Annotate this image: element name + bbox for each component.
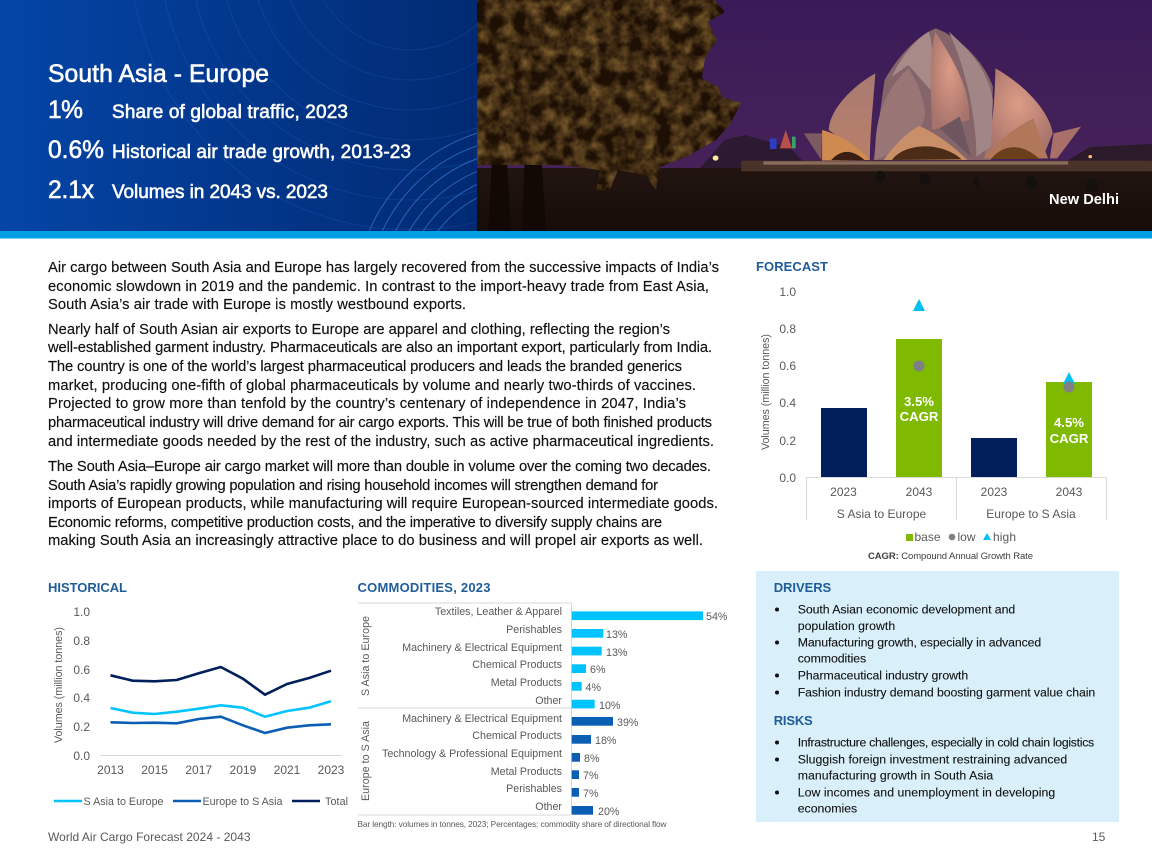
commodities bar chart: Other — [535, 801, 562, 813]
panel: forecast — [756, 259, 1106, 562]
commodities bar chart: Perishables — [506, 783, 562, 795]
forecast bar chart: 2023 — [981, 485, 1008, 499]
commodities bar chart: Other — [535, 695, 562, 707]
forecast bar chart: 2043 — [906, 485, 933, 499]
forecast heading: FORECAST — [756, 259, 828, 274]
stat: historical growth: 0.6% — [48, 137, 104, 164]
paragraph 1: South Asia’s air trade with Europe is mostly westbound exports. — [48, 297, 466, 313]
paragraph 3: imports of European products, while manufacturing will require European-sourced intermediate goods. — [48, 496, 718, 512]
stat: share of traffic: Share of global traffic, 2023 — [112, 102, 348, 123]
stat: historical growth — [48, 137, 411, 164]
photo caption: New Delhi — [1049, 192, 1119, 208]
commodities bar chart: 13% — [606, 647, 628, 659]
historical legend: Total — [325, 796, 348, 808]
forecast legend: high — [993, 530, 1016, 544]
line chart: 2019 — [230, 763, 257, 777]
paragraph 3: South Asia’s rapidly growing population and rising household incomes will strengthen demand for — [48, 478, 658, 494]
commodities bar chart: Machinery & Electrical Equipment — [402, 642, 562, 654]
commodities bar chart: Chemical Products — [472, 659, 562, 671]
panel: historical — [48, 580, 348, 808]
body text — [47, 260, 719, 549]
forecast bar chart: 1.0 — [779, 285, 796, 299]
panel: drivers and risks — [756, 571, 1119, 822]
paragraph 2: Nearly half of South Asian air exports to Europe are apparel and clothing, reflecting the region’s — [48, 322, 670, 338]
risks list: economies — [798, 802, 857, 816]
commodities bar chart: 4% — [586, 682, 601, 694]
commodities bar chart: 10% — [599, 700, 621, 712]
paragraph 3: The South Asia–Europe air cargo market will more than double in volume over the coming two decades. — [48, 459, 711, 475]
line chart: 0.4 — [73, 691, 90, 705]
risks list: Low incomes and unemployment in developing — [798, 786, 1055, 800]
forecast legend: base — [914, 530, 941, 544]
risks heading: RISKS — [774, 713, 813, 728]
paragraph 1 — [48, 260, 719, 313]
line chart: 2015 — [141, 763, 168, 777]
line chart: 2017 — [185, 763, 212, 777]
commodities bar chart: Chemical Products — [472, 730, 562, 742]
header banner — [0, 0, 1152, 239]
forecast legend — [906, 530, 1016, 544]
risks list — [775, 736, 1094, 816]
line chart: 0.8 — [73, 634, 90, 648]
paragraph 3: making South Asia an increasingly attractive place to do business and will propel air exports as well. — [48, 533, 703, 549]
paragraph 2: Projected to grow more than tenfold by the country’s centenary of independence in 2047, India’s — [48, 396, 686, 412]
drivers list: commodities — [798, 652, 866, 666]
forecast bar chart: 4.5% — [1054, 415, 1084, 430]
line chart: Volumes (million tonnes) — [53, 627, 65, 743]
stat: historical growth: Historical air trade growth, 2013-23 — [112, 142, 411, 163]
photo: Lotus Temple, New Delhi — [477, 0, 1152, 231]
commodities footnote: Bar length: volumes in tonnes, 2023; Percentages: commodity share of directional flow — [358, 819, 668, 829]
footer: 15 — [1092, 830, 1106, 844]
forecast bar chart: Europe to S Asia — [986, 507, 1076, 521]
risks list: manufacturing growth in South Asia — [798, 769, 993, 783]
commodities bar chart: Machinery & Electrical Equipment — [402, 713, 562, 725]
commodities bar chart: 39% — [617, 717, 639, 729]
CAGR note: CAGR: Compound Annual Growth Rate — [868, 551, 1033, 562]
paragraph 1: Air cargo between South Asia and Europe has largely recovered from the successive impacts of India’s — [48, 260, 719, 276]
panel: commodities — [358, 580, 728, 829]
paragraph 2: well-established garment industry. Pharmaceuticals are also an important export, particularly from India. — [47, 340, 712, 356]
paragraph 2: and intermediate goods needed by the rest of the industry, such as active pharmaceutical ingredients. — [48, 434, 714, 450]
commodities bar chart: Metal Products — [491, 766, 562, 778]
risks list: Sluggish foreign investment restraining advanced — [798, 753, 1067, 767]
commodities bar chart: 7% — [583, 770, 599, 782]
stat: share of traffic — [48, 97, 348, 124]
forecast bar chart: 0.8 — [779, 322, 796, 336]
commodities bar chart: S Asia to Europe — [360, 616, 372, 696]
paragraph 2: pharmaceutical industry will drive demand for air cargo exports. This will be true of both finished products — [48, 415, 712, 431]
forecast bar chart: Volumes (million tonnes) — [760, 334, 772, 450]
risks list: Infrastructure challenges, especially in cold chain logistics — [798, 736, 1094, 750]
forecast bar chart: 3.5% — [904, 394, 934, 409]
drivers list: Fashion industry demand boosting garment value chain — [798, 686, 1095, 700]
forecast bar chart: 0.0 — [779, 471, 796, 485]
forecast bar chart: 0.6 — [779, 359, 796, 373]
forecast bar chart: 2043 — [1056, 485, 1083, 499]
forecast bar chart: 0.4 — [779, 396, 796, 410]
drivers list: Manufacturing growth, especially in advanced — [798, 636, 1041, 650]
forecast bar chart: 2023 — [830, 485, 857, 499]
historical heading: HISTORICAL — [48, 580, 127, 595]
paragraph 2: market, producing one-fifth of global pharmaceuticals by volume and nearly two-thirds of vaccines. — [48, 378, 696, 394]
stat: volumes multiple: Volumes in 2043 vs. 2023 — [112, 182, 328, 203]
line chart: 2023 — [318, 763, 345, 777]
commodities bar chart: 54% — [706, 611, 728, 623]
line chart — [53, 605, 345, 777]
commodities bar chart: Technology & Professional Equipment — [382, 748, 562, 760]
paragraph 2 — [47, 322, 714, 450]
commodities bar chart: Europe to S Asia — [360, 721, 372, 801]
stat: share of traffic: 1% — [48, 97, 83, 124]
line chart: 0.0 — [73, 749, 90, 763]
historical legend — [54, 796, 348, 808]
commodities bar chart — [358, 603, 728, 818]
commodities bar chart: Perishables — [506, 624, 562, 636]
drivers list — [775, 603, 1095, 700]
line chart: 2021 — [274, 763, 301, 777]
stat: volumes multiple — [48, 177, 328, 204]
drivers heading: DRIVERS — [774, 580, 832, 595]
commodities bar chart: 20% — [598, 806, 620, 818]
historical legend: Europe to S Asia — [202, 796, 283, 808]
forecast bar chart: S Asia to Europe — [837, 507, 927, 521]
commodities bar chart: Textiles, Leather & Apparel — [435, 606, 562, 618]
forecast legend: low — [958, 530, 976, 544]
commodities heading: COMMODITIES, 2023 — [358, 580, 490, 595]
title: South Asia - Europe — [48, 61, 269, 88]
forecast bar chart — [760, 285, 1106, 521]
forecast bar chart: CAGR — [1050, 431, 1089, 446]
commodities bar chart: 6% — [590, 664, 606, 676]
stat: volumes multiple: 2.1x — [48, 177, 95, 204]
line chart: 0.6 — [73, 663, 90, 677]
tree — [477, 0, 747, 231]
paragraph 1: economic slowdown in 2019 and the pandemic. In contrast to the import-heavy trade from East Asia, — [48, 279, 709, 295]
line chart: 2013 — [97, 763, 124, 777]
footer — [48, 830, 1106, 844]
drivers list: Pharmaceutical industry growth — [798, 669, 968, 683]
commodities bar chart: 8% — [584, 753, 600, 765]
paragraph 2: The country is one of the world’s largest pharmaceutical producers and leads the branded generics — [48, 359, 682, 375]
paragraph 3: Economic reforms, competitive production costs, and the imperative to diversify supply chains are — [48, 515, 662, 531]
commodities bar chart: 7% — [583, 788, 599, 800]
drivers list: population growth — [798, 619, 895, 633]
forecast bar chart: CAGR — [900, 409, 939, 424]
accent stripe — [0, 231, 1152, 239]
line chart: 0.2 — [73, 720, 90, 734]
forecast bar chart: 0.2 — [779, 434, 796, 448]
historical legend: S Asia to Europe — [84, 796, 164, 808]
blue title panel — [0, 0, 477, 231]
paragraph 3 — [48, 459, 718, 549]
footer: World Air Cargo Forecast 2024 - 2043 — [48, 830, 251, 844]
commodities bar chart: 18% — [595, 735, 617, 747]
commodities bar chart: Metal Products — [491, 677, 562, 689]
line chart: 1.0 — [73, 605, 90, 619]
commodities bar chart: 13% — [606, 629, 628, 641]
drivers list: South Asian economic development and — [798, 603, 1015, 617]
